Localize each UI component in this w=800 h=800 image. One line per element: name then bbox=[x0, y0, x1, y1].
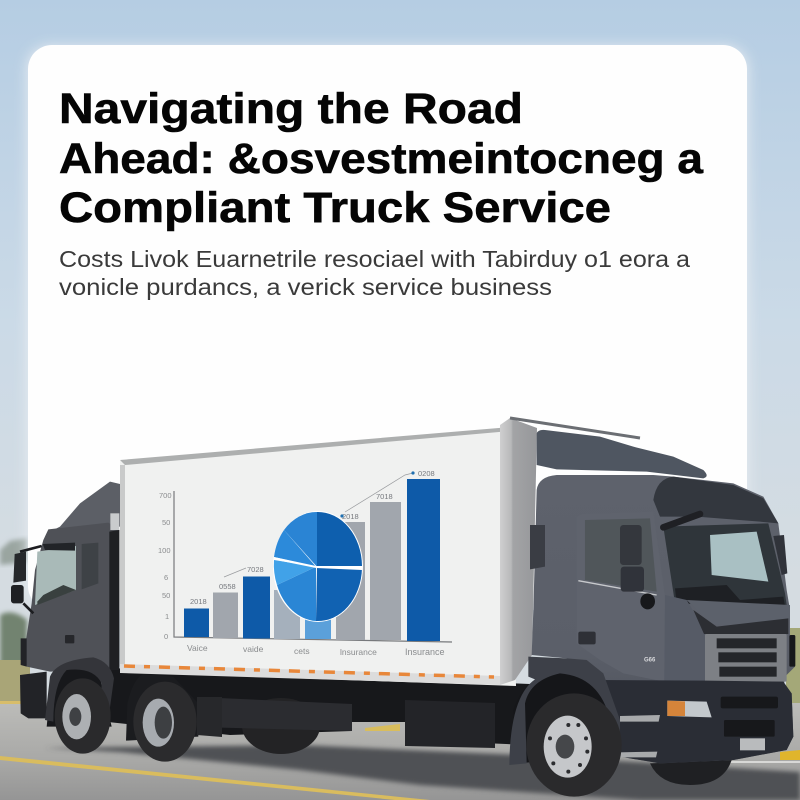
roof air deflector bbox=[537, 430, 707, 478]
upper front panel bbox=[687, 600, 790, 627]
bar value labels bbox=[190, 469, 435, 606]
first wheel recess bbox=[47, 668, 112, 727]
title bbox=[59, 85, 704, 232]
lower cab bbox=[600, 680, 793, 763]
title: Navigating the Road bbox=[59, 85, 523, 133]
door window bbox=[585, 518, 657, 592]
sun visor bbox=[43, 543, 75, 551]
front cab traced group bbox=[509, 430, 795, 797]
cargo box bbox=[120, 427, 516, 686]
front wheel hub bbox=[556, 735, 574, 759]
rear cab traced group bbox=[11, 482, 198, 762]
door mirror bottom bbox=[621, 567, 644, 592]
license plate bbox=[740, 738, 765, 750]
left mirrors bbox=[13, 552, 26, 583]
axis labels: 700 bbox=[159, 491, 172, 500]
door mirror top bbox=[620, 525, 642, 565]
door handle bbox=[578, 632, 596, 644]
door panel bbox=[577, 512, 665, 682]
chassis frame bbox=[108, 668, 530, 745]
roof fairing bbox=[47, 482, 120, 533]
title: Compliant Truck Service bbox=[59, 184, 611, 232]
bar value labels: 2018 bbox=[342, 512, 359, 521]
windshield bbox=[663, 523, 787, 605]
background: distant trees and grass bbox=[0, 538, 800, 706]
bars bbox=[184, 608, 209, 637]
first wheel rim bbox=[62, 694, 91, 739]
mirror arm bbox=[20, 546, 42, 613]
axis labels: lnsurance bbox=[340, 647, 377, 657]
axis labels: vaide bbox=[243, 644, 264, 654]
second wheel hub bbox=[155, 707, 172, 739]
dash silhouette bbox=[37, 585, 76, 605]
axis labels: Vaice bbox=[187, 643, 208, 653]
first wheel bbox=[55, 678, 111, 754]
third wheel bbox=[242, 698, 320, 754]
side vent bbox=[530, 525, 545, 569]
card shadow bbox=[26, 45, 749, 610]
axis labels: Insurance bbox=[405, 647, 445, 657]
wheel arch bbox=[509, 657, 620, 765]
hood corner bbox=[664, 595, 708, 682]
subtitle: vonicle purdancs, a verick service business bbox=[59, 274, 552, 300]
axis labels: 0 bbox=[164, 632, 168, 641]
orange reflector strip bbox=[124, 666, 494, 677]
bar value labels: 2018 bbox=[190, 597, 207, 606]
chart on truck bbox=[158, 469, 452, 657]
silver pillar patch bbox=[110, 513, 119, 530]
bar value labels: 0558 bbox=[219, 582, 236, 591]
front wheel bbox=[526, 693, 622, 797]
cab body bbox=[532, 475, 795, 763]
door window bbox=[82, 543, 98, 589]
dark visor bbox=[653, 477, 778, 523]
wheel bolts bbox=[548, 723, 589, 774]
windshield reflection bbox=[710, 532, 768, 582]
roof rail bbox=[510, 418, 640, 438]
leader lines bbox=[224, 473, 413, 577]
steps bbox=[618, 715, 660, 757]
side fuel tanks bbox=[197, 697, 495, 748]
white title card bbox=[28, 45, 747, 610]
cargo box side panel bbox=[500, 418, 537, 685]
door handle bbox=[65, 635, 74, 643]
truck bbox=[11, 418, 795, 797]
second wheel bbox=[133, 682, 197, 762]
front bumper bbox=[20, 638, 47, 718]
cab body bbox=[25, 523, 119, 672]
subtitle bbox=[59, 246, 691, 300]
second front axle wheel bbox=[650, 760, 732, 785]
model badge: G66 bbox=[644, 658, 656, 664]
cab windshield bbox=[35, 546, 76, 605]
axis labels: 1 bbox=[165, 612, 169, 621]
axis labels bbox=[158, 491, 445, 657]
wheel recess bbox=[513, 672, 615, 763]
right mirror bbox=[773, 535, 787, 575]
top mirror arm bbox=[663, 514, 700, 527]
first wheel hub bbox=[69, 707, 81, 726]
bar value labels: 7028 bbox=[247, 565, 264, 574]
axis labels: cets bbox=[294, 646, 310, 656]
front wheel rim bbox=[544, 716, 592, 778]
leader dots bbox=[340, 471, 415, 518]
second wheel rim bbox=[143, 699, 174, 747]
pie chart bbox=[273, 511, 363, 622]
mirror arm bulb bbox=[640, 593, 655, 609]
bumper vents bbox=[721, 697, 778, 737]
wheel arch bbox=[45, 657, 114, 727]
bar value labels: 7018 bbox=[376, 492, 393, 501]
grille edge bbox=[789, 635, 795, 667]
axis labels: 6 bbox=[164, 573, 168, 582]
axis labels: 50 bbox=[162, 518, 170, 527]
headlight bbox=[667, 701, 712, 717]
chart axes bbox=[174, 491, 452, 642]
headlight amber bbox=[667, 701, 685, 716]
bar value labels: 0208 bbox=[418, 469, 435, 478]
axis labels: 100 bbox=[158, 546, 171, 555]
wipers and cowl bbox=[675, 585, 785, 606]
axis labels: 50 bbox=[162, 591, 170, 600]
black pillar bbox=[109, 530, 119, 670]
road bbox=[0, 701, 800, 800]
title: Ahead: &osvestmeintocneg a bbox=[59, 135, 704, 183]
grille slats bbox=[717, 638, 777, 677]
grille bbox=[705, 634, 787, 682]
door highlight bbox=[578, 581, 657, 595]
second wheel arch bbox=[126, 674, 198, 741]
subtitle: Costs Livok Euarnetrile resociael with Tabirduy o1 eora a bbox=[59, 246, 691, 272]
dark band bbox=[693, 610, 788, 634]
